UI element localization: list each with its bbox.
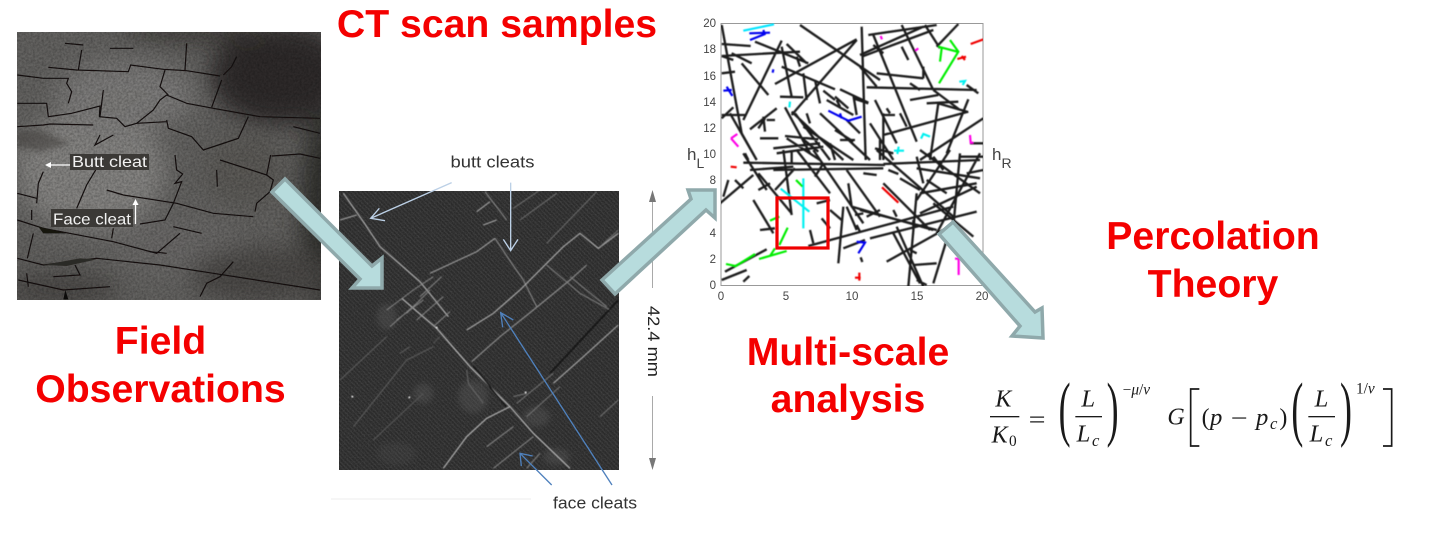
formula: percolation scaling law: c [1270,414,1278,433]
axis ticks and labels [703,18,988,303]
formula: percolation scaling law: p [1208,404,1222,431]
formula: percolation scaling law: p [1254,404,1268,431]
arrow: butt cleats down [503,183,518,251]
formula: percolation scaling law: ( [1291,370,1303,449]
chart: fracture network [703,18,988,303]
formula: percolation scaling law: = [1029,406,1046,433]
selection box: red square [777,198,828,248]
heading: Field Observations: Field [115,320,206,363]
formula: percolation scaling law: −μ/ν [1123,382,1150,399]
formula: percolation scaling law: K [991,422,1010,448]
formula: percolation scaling law: ) [1107,370,1119,449]
label: face cleats [501,313,637,512]
label: h_R: h [992,145,1001,164]
formula: percolation scaling law: c [1092,431,1100,450]
title: CT scan samples: CT scan samples [337,3,657,46]
heading: Percolation Theory: Percolation [1106,215,1320,258]
heading: Percolation Theory: Theory [1148,263,1279,306]
label: butt cleats [371,152,534,221]
heading: Field Observations: Observations [35,368,286,411]
formula: percolation scaling law: L [1309,421,1323,448]
formula: percolation scaling law: − [1231,405,1248,431]
label: h_R: R [1001,155,1012,171]
arrow: face cleats long [501,313,612,485]
axis ticks and labels: 0 [710,280,716,292]
formula: percolation scaling law: 0 [1009,433,1017,450]
formula: percolation scaling law: ( [1202,405,1210,431]
heading: Multi-scale analysis: Multi-scale [747,331,949,374]
arrow: CT to network [602,190,715,294]
cracks in coal photo [17,43,320,297]
axis ticks and labels: 0 [718,291,724,303]
axis ticks and labels: 15 [911,291,923,303]
axis ticks and labels: 5 [783,291,789,303]
formula: percolation scaling law: L [1314,386,1328,413]
axis ticks and labels: 2 [710,254,716,266]
formula: percolation scaling law: G [1167,404,1185,430]
axis ticks and labels: 8 [710,175,716,187]
heading: Field Observations [35,320,286,411]
axis ticks and labels: 16 [703,71,716,83]
coloured fracture clusters [723,24,983,154]
panel: CT scan image [339,190,619,470]
axis ticks and labels: 12 [703,123,716,135]
arrow: face cleats short [520,453,552,485]
axis ticks and labels: 4 [710,228,717,240]
axis ticks and labels: 10 [846,291,858,303]
formula: percolation scaling law: 1/ν [1356,380,1375,397]
label: Butt cleat [45,154,149,171]
axis ticks and labels: 20 [976,291,988,303]
label: Face cleat: Face cleat [53,212,132,228]
arrow: photo to CT [272,179,382,288]
label: face cleats: face cleats [553,494,637,512]
heading: Percolation Theory [1106,215,1320,306]
axis ticks and labels: 14 [703,97,717,109]
arrow: network to theory [939,222,1043,338]
heading: Multi-scale analysis [747,331,949,421]
formula: percolation scaling law: ) [1340,370,1352,449]
CT scan fractures [340,190,618,468]
dimension: 42.4 mm: 42.4 mm [644,306,663,377]
label: Butt cleat: Butt cleat [72,154,148,171]
dark smears in coal photo [17,130,97,299]
axis ticks and labels: 20 [703,18,716,30]
label: h_L: L [696,155,704,171]
label: butt cleats: butt cleats [450,152,534,172]
label: Face cleat [51,199,138,228]
photo: field coal face with cleats [17,32,321,300]
formula: percolation scaling law: c [1325,431,1333,450]
formula: percolation scaling law: L [1080,386,1095,413]
formula: percolation scaling law: K [994,387,1013,413]
label: h_L: h [687,145,696,164]
axis ticks and labels: 10 [703,149,716,161]
formula: percolation scaling law [990,370,1392,450]
axis ticks and labels: 6 [710,202,716,214]
arrow: butt cleats left [371,183,452,221]
axis ticks and labels: 18 [703,44,716,56]
dimension: 42.4 mm [644,190,663,470]
CT bright specks [351,327,527,398]
formula: percolation scaling law: ) [1279,405,1287,431]
heading: Multi-scale analysis: analysis [771,378,925,421]
formula: percolation scaling law: ( [1059,370,1071,449]
formula: percolation scaling law: L [1076,421,1090,448]
black fractures [720,24,983,287]
